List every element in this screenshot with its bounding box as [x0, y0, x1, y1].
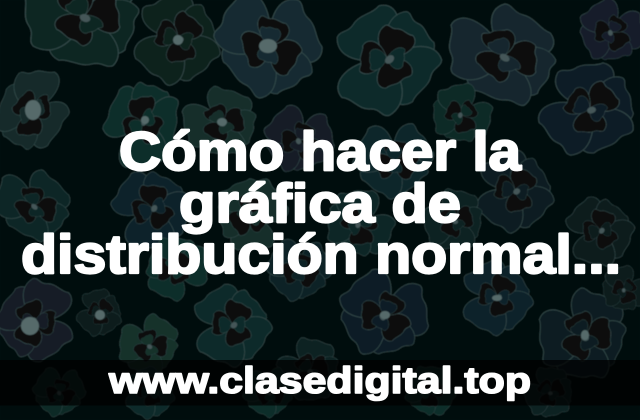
title — [21, 120, 621, 285]
title: distribución normal... — [21, 223, 621, 285]
website address: www.clasedigital.top — [108, 360, 531, 401]
highlights on rosette hearts — [21, 35, 589, 340]
title: Cómo hacer la — [119, 120, 521, 182]
footer band — [0, 360, 640, 406]
title: gráfica de — [179, 172, 461, 234]
